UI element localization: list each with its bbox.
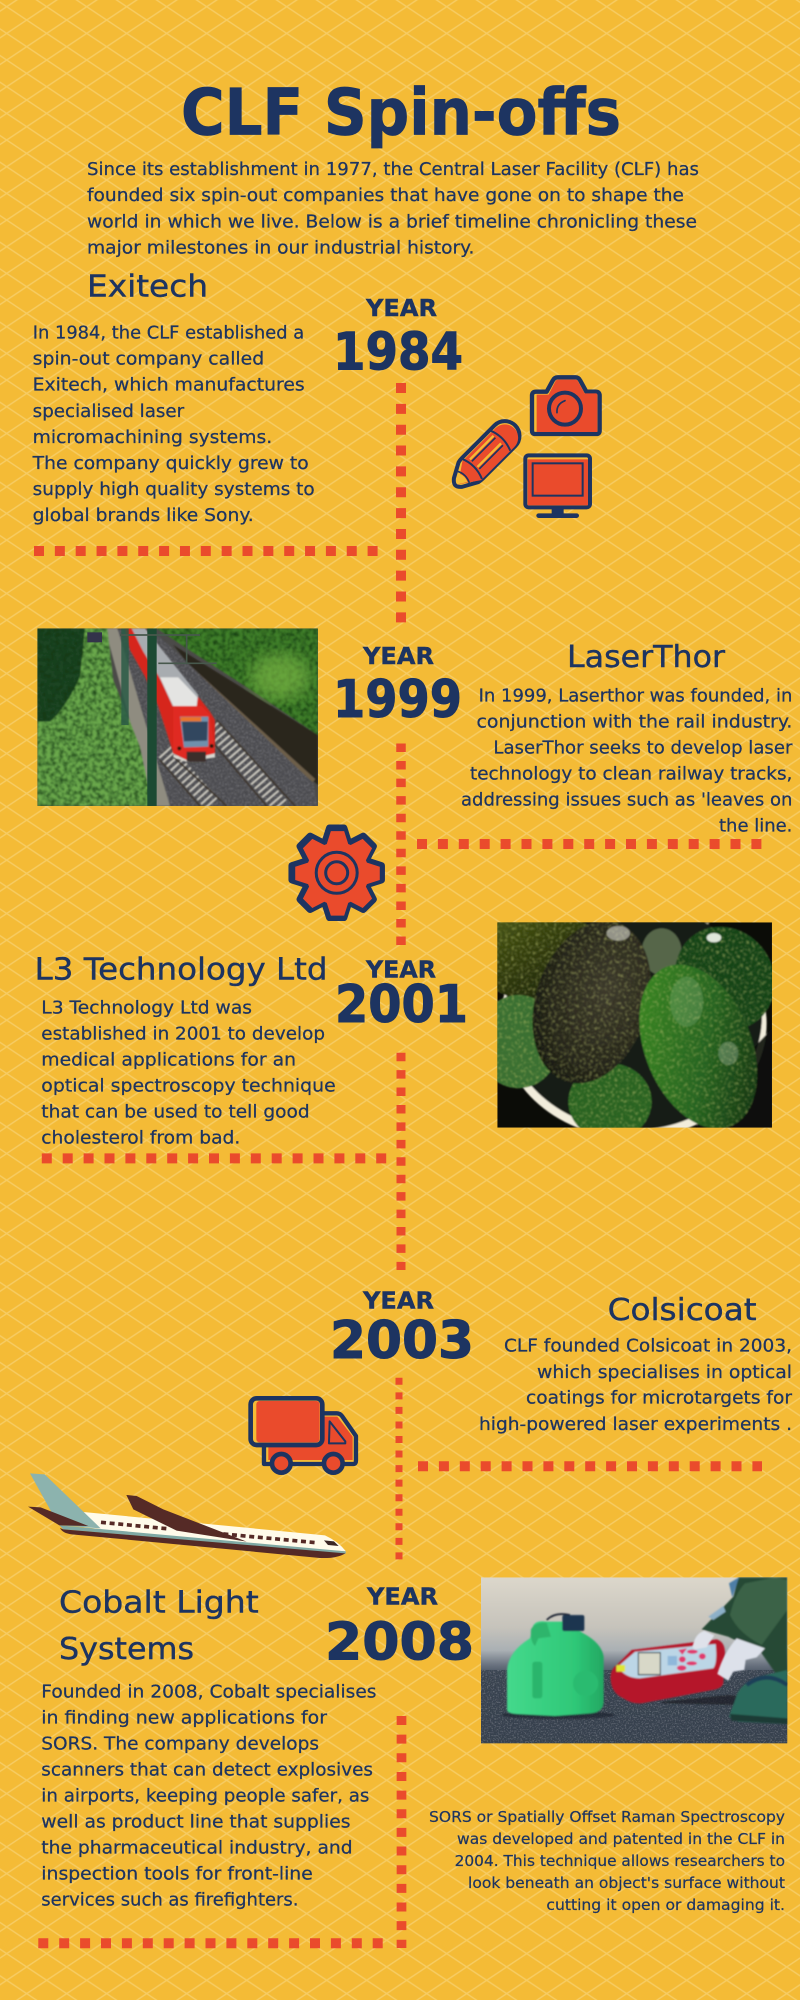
title: CLF Spin-offs xyxy=(181,76,621,150)
catenary masts xyxy=(87,628,217,806)
text block: Colsicoat description: CLF founded Colsicoat in 2003, xyxy=(504,1335,792,1356)
photo: avocados xyxy=(497,922,772,1128)
text block: Exitech description xyxy=(32,322,315,526)
text block: L3 description xyxy=(41,997,336,1148)
icon: truck xyxy=(251,1398,356,1473)
heading: Cobalt Light Systems xyxy=(59,1586,259,1667)
panel: LaserThor 1999 xyxy=(37,628,793,945)
text block: Exitech description: spin-out company called xyxy=(33,349,264,370)
text block: LaserThor description: In 1999, Laserthor was founded, in xyxy=(479,685,792,706)
icon: pencil xyxy=(445,415,526,496)
year label 2001: YEAR xyxy=(365,958,436,984)
text block: Cobalt description: in airports, keeping people safer, as xyxy=(41,1786,369,1807)
panel: Colsicoat 2003 xyxy=(28,1288,793,1560)
intro text: world in which we live. Below is a brief timeline chronicling these xyxy=(87,211,697,232)
photo: red train on railway xyxy=(37,628,318,806)
train body xyxy=(125,628,215,762)
text block: L3 description: medical applications for an xyxy=(41,1049,296,1070)
text block: L3 description: L3 Technology Ltd was xyxy=(41,997,252,1018)
text block: Exitech description: global brands like Sony. xyxy=(33,505,254,526)
text block: SORS note: 2004. This technique allows researchers to xyxy=(455,1852,785,1870)
year label 1984: 1984 xyxy=(333,323,463,383)
timeline dashes 2001 xyxy=(42,1053,401,1270)
illustration: airplane xyxy=(28,1473,346,1558)
panel: Cobalt Light Systems 2008 xyxy=(38,1577,787,1948)
text block: Exitech description: The company quickly grew to xyxy=(32,453,309,474)
text block: Colsicoat description: which specialises in optical xyxy=(537,1362,792,1383)
year label 1999: YEAR xyxy=(362,644,434,670)
text block: Exitech description: supply high quality systems to xyxy=(33,479,315,500)
year label 2003: 2003 xyxy=(330,1311,474,1371)
heading: Exitech: Exitech xyxy=(87,270,208,304)
text block: Cobalt description: well as product line that supplies xyxy=(41,1812,351,1832)
text block: Cobalt description: scanners that can detect explosives xyxy=(41,1759,373,1780)
text block: L3 description: that can be used to tell good xyxy=(41,1101,310,1122)
timeline dashes 2003 xyxy=(399,1378,762,1560)
text block: SORS note: look beneath an object's surface without xyxy=(468,1874,785,1892)
intro text: major milestones in our industrial history. xyxy=(87,238,474,258)
text block: Cobalt description: in finding new applications for xyxy=(41,1708,328,1729)
photo: green canister and red scanner xyxy=(481,1577,787,1743)
timeline dashes 2008 xyxy=(38,1716,402,1948)
year label 1984: YEAR xyxy=(365,296,437,322)
intro text: founded six spin-out companies that have gone on to shape the xyxy=(87,185,684,206)
text block: SORS note xyxy=(429,1808,785,1914)
text block: Cobalt description: services such as firefighters. xyxy=(41,1890,299,1910)
text block: LaserThor description: conjunction with the rail industry. xyxy=(476,711,792,732)
timeline dashes 1984 xyxy=(34,383,401,623)
text block: Cobalt description: SORS. The company develops xyxy=(41,1734,319,1754)
year label 1999: 1999 xyxy=(333,670,462,730)
panel: Exitech 1984 xyxy=(32,270,600,623)
text block: Cobalt description: the pharmaceutical industry, and xyxy=(41,1837,353,1858)
text block: LaserThor description xyxy=(461,685,793,836)
year label 1999 xyxy=(333,644,462,730)
heading: Cobalt Light Systems: Cobalt Light xyxy=(59,1586,259,1621)
intro text: Since its establishment in 1977, the Central Laser Facility (CLF) has xyxy=(87,159,699,180)
text block: Cobalt description: inspection tools for front-line xyxy=(41,1864,313,1885)
year label 2003: YEAR xyxy=(362,1288,434,1314)
year label 1984 xyxy=(333,296,463,383)
year label 2008: 2008 xyxy=(325,1613,474,1673)
text block: LaserThor description: technology to clean railway tracks, xyxy=(470,764,792,784)
icon: camera xyxy=(532,377,600,434)
text block: SORS note: SORS or Spatially Offset Raman Spectroscopy xyxy=(429,1808,785,1826)
text block: Colsicoat description xyxy=(479,1335,793,1435)
text block: LaserThor description: LaserThor seeks to develop laser xyxy=(493,738,793,758)
icon: monitor xyxy=(525,455,590,518)
heading: Colsicoat: Colsicoat xyxy=(608,1293,757,1328)
icon: gear xyxy=(292,828,381,917)
text block: L3 description: optical spectroscopy technique xyxy=(41,1075,336,1096)
icons: camera, pencil, monitor xyxy=(445,377,600,518)
heading: L3 Technology Ltd: L3 Technology Ltd xyxy=(35,953,327,988)
text block: LaserThor description: addressing issues such as 'leaves on xyxy=(461,790,792,810)
text block: Cobalt description xyxy=(41,1681,377,1910)
year label 2008 xyxy=(325,1584,474,1673)
text block: Colsicoat description: coatings for microtargets for xyxy=(526,1388,793,1409)
text block: SORS note: was developed and patented in the CLF in xyxy=(457,1830,785,1848)
text block: SORS note: cutting it open or damaging it. xyxy=(546,1896,785,1914)
year label 2001: 2001 xyxy=(335,975,468,1035)
text block: Colsicoat description: high-powered laser experiments . xyxy=(479,1414,792,1435)
text block: Exitech description: In 1984, the CLF established a xyxy=(33,322,304,344)
text block: L3 description: established in 2001 to develop xyxy=(41,1023,325,1044)
panel: L3 Technology 2001 xyxy=(35,903,795,1270)
text block: Exitech description: micromachining systems. xyxy=(33,427,272,448)
timeline dashes 1999 xyxy=(401,744,762,945)
text block: Cobalt description: Founded in 2008, Cobalt specialises xyxy=(41,1681,377,1702)
intro text xyxy=(87,159,699,258)
text block: Exitech description: specialised laser xyxy=(33,401,185,422)
text block: LaserThor description: the line. xyxy=(719,816,792,836)
text block: L3 description: cholesterol from bad. xyxy=(41,1127,240,1148)
year label 2008: YEAR xyxy=(366,1584,438,1610)
text block: Exitech description: Exitech, which manufactures xyxy=(33,375,305,396)
heading: LaserThor: LaserThor xyxy=(567,640,726,675)
heading: Cobalt Light Systems: Systems xyxy=(59,1632,194,1667)
